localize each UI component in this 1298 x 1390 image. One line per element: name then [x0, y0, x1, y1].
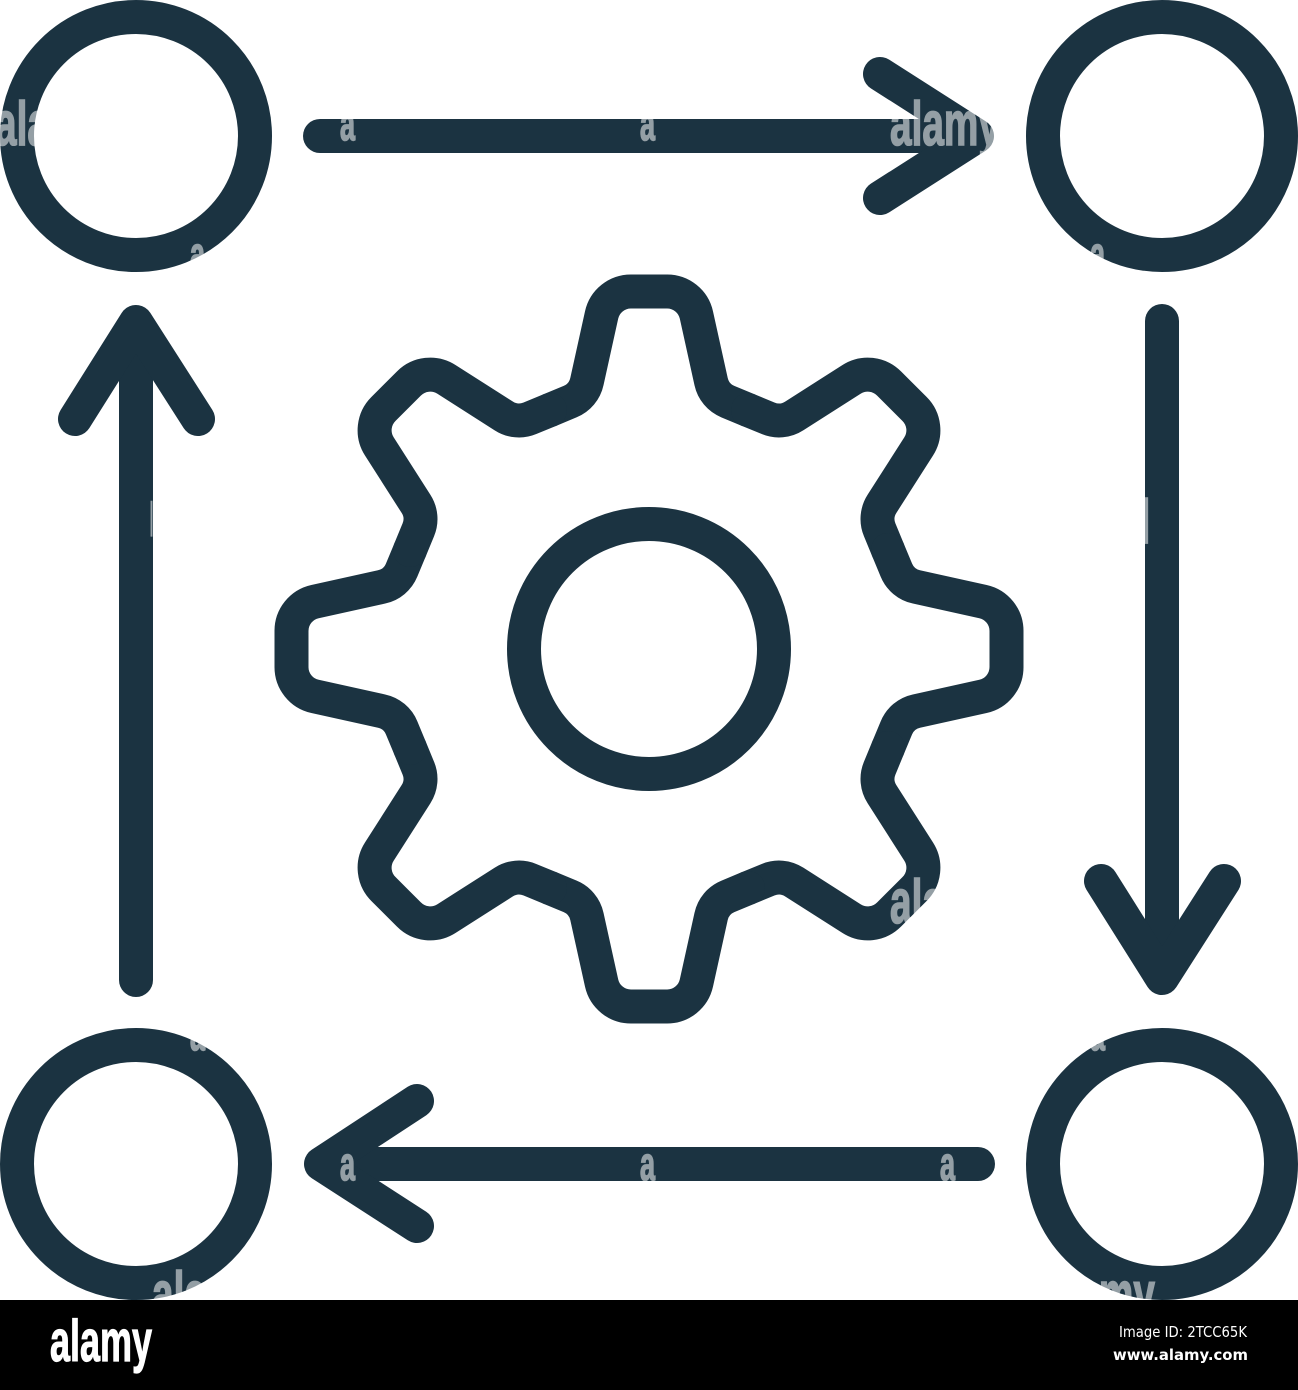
watermark text: a: [340, 97, 355, 150]
footer bar: [0, 1300, 1298, 1390]
footer image id: Image ID: 2TCC65K: [1119, 1323, 1248, 1341]
node: top right circle: [1043, 17, 1281, 255]
watermark text: alamy: [152, 1260, 262, 1329]
watermark text: a: [640, 97, 655, 150]
watermark text: [0, 90, 1155, 1329]
node: top left circle: [17, 17, 255, 255]
arrow: left, pointing up: [75, 322, 198, 980]
watermark text: alamy: [1045, 1260, 1155, 1329]
footer logo: alamy: [50, 1309, 152, 1374]
watermark text: a: [190, 227, 205, 280]
footer url: www.alamy.com: [1113, 1346, 1248, 1364]
arrow: top, pointing right: [320, 74, 977, 198]
node: bottom right circle: [1043, 1045, 1281, 1283]
watermark text: a: [1090, 1007, 1105, 1060]
watermark text: l: [1141, 488, 1150, 557]
watermark text: a: [640, 1137, 655, 1190]
watermark text: a: [340, 1137, 355, 1190]
icon: central gear: [291, 291, 1007, 1007]
watermark text: a: [940, 1137, 955, 1190]
node: bottom left circle: [17, 1045, 255, 1283]
watermark text: a: [190, 1007, 205, 1060]
watermark text: alamy: [890, 868, 1000, 937]
watermark text: alamy: [0, 90, 105, 159]
arrow: bottom, pointing left: [321, 1101, 978, 1226]
watermark text: l: [150, 493, 153, 546]
arrow: right, pointing down: [1101, 321, 1224, 978]
watermark text: a: [1090, 227, 1105, 280]
watermark text: alamy: [890, 90, 1000, 159]
